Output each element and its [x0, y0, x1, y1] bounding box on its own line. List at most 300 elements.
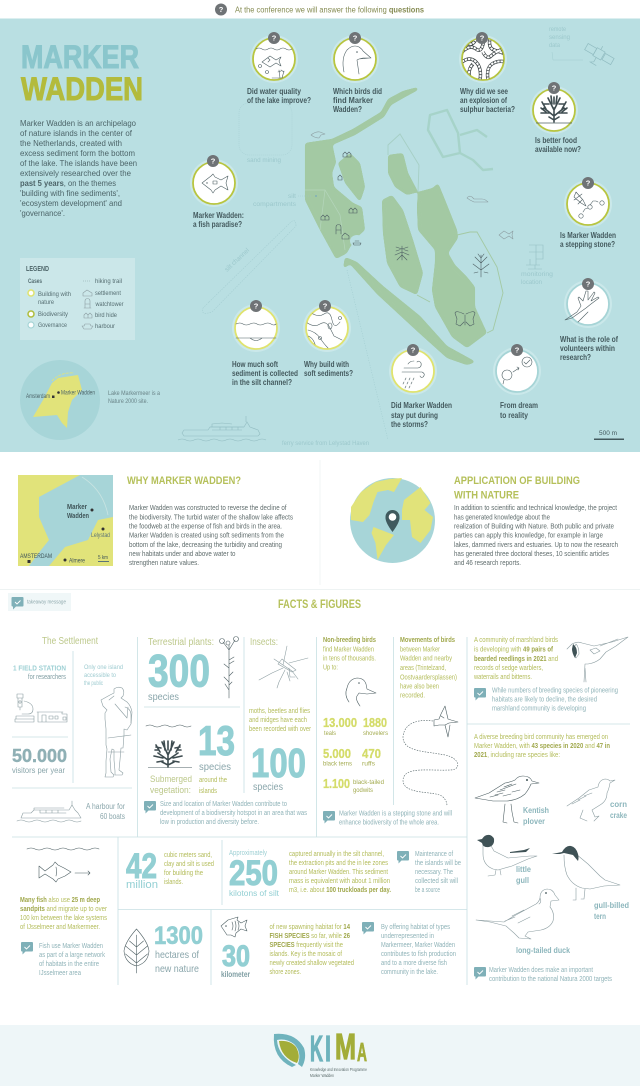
panel: submerged vegetation: species: [199, 762, 231, 773]
panel: 42 million: islands.: [164, 879, 183, 886]
question: food: [530, 82, 581, 154]
question: water quality: [247, 32, 311, 105]
question: volunteers: volunteers within: [560, 343, 615, 353]
text block: realization of Building with Nature. Both public and private: [454, 521, 614, 530]
takeaway: fish production: underrepresented in: [381, 933, 434, 940]
panel: submerged vegetation: [146, 717, 235, 796]
field station: [13, 664, 66, 681]
takeaway: marshland community: While numbers of breeding species of pioneering: [492, 688, 618, 694]
legend: LEGEND: [26, 266, 49, 273]
icon: mosquito: [395, 246, 409, 260]
takeaway: fish production: and to a more diverse fish: [381, 960, 447, 967]
intro text: the Netherlands, created with: [20, 138, 122, 148]
map labels: sensing: [549, 34, 570, 41]
locator map: Netherlands: [20, 360, 100, 440]
panel: 30 kilometer: newly created shallow vegetated: [270, 960, 354, 967]
takeaway: stepping stone: enhance biodiversity of the whole area.: [339, 820, 439, 826]
takeaway: habitat network: of habitats in the entire: [39, 961, 99, 968]
panel: insects: Insects:: [250, 637, 278, 648]
question: storms: the storms?: [391, 419, 428, 429]
takeaway: marshland community: habitats are likely to decline, the desired: [492, 696, 597, 704]
figures: shovelers: [363, 730, 389, 737]
figures: teals: [324, 730, 337, 737]
icon: fish: [499, 231, 513, 239]
logo: KIMA: M: [335, 1026, 356, 1067]
public access note: [84, 664, 123, 687]
text block: Marker Wadden was constructed to reverse the decline of: [129, 503, 287, 512]
takeaway: habitat network: IJsselmeer area: [39, 970, 81, 977]
panel: why Marker Wadden: [18, 475, 293, 567]
takeaway: biodiversity hotspot: [144, 801, 307, 826]
intro text: 'building with fine sediments',: [20, 188, 120, 198]
map labels: compartments: [253, 201, 297, 208]
panel: non-breeding birds: find Marker Wadden: [323, 646, 374, 654]
question: sulphur bacteria: an explosion of: [460, 95, 507, 105]
question: volunteers: research?: [560, 352, 591, 362]
map labels: ferry service from Lelystad Haven: [282, 440, 369, 447]
question: soft sediments: soft sediments?: [304, 368, 353, 378]
question: birds: find Marker: [333, 95, 374, 105]
legend: bird hide: [95, 313, 118, 319]
takeaway: habitat network: [21, 942, 105, 977]
panel: breeding birds: [474, 734, 629, 955]
figures: ruffs: [362, 761, 376, 768]
header text: At the conference we will answer the following questions: [235, 5, 425, 14]
panel: 42 million: 42: [126, 847, 157, 886]
question: storms: Did Marker Wadden: [391, 400, 452, 410]
text block: the biodiversity. The turbid water of the shallow lake affects: [129, 512, 293, 521]
panel: marshland birds: is developing with 49 pairs of: [474, 646, 554, 654]
question: soft sediments: [303, 300, 353, 378]
panel: submerged vegetation: around the: [199, 777, 227, 784]
takeaway: maintenance: [397, 851, 461, 894]
takeaway: stepping stone: Marker Wadden is a stepping stone and will: [339, 810, 452, 818]
panel: 250 kilotons: 250: [229, 854, 278, 893]
icon: watchtower and settlement: [336, 224, 349, 239]
harbour water: [350, 235, 364, 247]
panel: insects: and midges have each: [249, 717, 307, 724]
dotted flight route: [403, 720, 458, 806]
text block: parties can apply this knowledge, for example in large: [454, 531, 603, 540]
panel: non-breeding birds: Up to:: [323, 664, 338, 672]
text block: has generated three doctoral theses, 10 scientific articles: [454, 549, 609, 558]
island shapes: [305, 87, 487, 365]
panel: 42 million: [126, 847, 214, 891]
takeaway: maintenance: Maintenance of: [415, 851, 453, 858]
bird: Kentish plover: [475, 776, 549, 826]
legend: harbour: [95, 324, 115, 330]
icon: ferry: [17, 801, 81, 822]
takeaway: biodiversity hotspot: low in production and diversity before.: [160, 819, 259, 826]
bird: long-tailed duck: [476, 889, 570, 955]
map: Markermeer: [18, 475, 113, 566]
text block: and 46 research reports.: [454, 558, 521, 567]
figures: 1880: [363, 715, 387, 730]
panel: breeding birds: Marker Wadden, with 43 species in 2020 and 47 in: [474, 743, 610, 750]
question: storms: stay put during: [391, 410, 438, 420]
takeaway: Natura 2000: Marker Wadden does make an important: [489, 967, 593, 974]
globe with pin: [350, 478, 435, 563]
bird: long-tailed duck: long-tailed duck: [516, 945, 570, 955]
text block: [454, 503, 618, 567]
scale bar: 500 m: [599, 430, 617, 437]
intro text: 'governance'.: [20, 208, 65, 218]
text block: the foodweb at the expense of fish and birds in the area.: [129, 521, 282, 530]
figures: 470: [362, 746, 381, 761]
takeaway: fish production: By offering habitat of types: [381, 924, 450, 931]
question: food: available now?: [535, 144, 581, 154]
question: silt channel: [232, 300, 298, 387]
panel: movements of birds: Oostvaardersplassen): [400, 674, 457, 682]
bird: gull-billed tern: tern: [594, 911, 606, 921]
intro text: Marker Wadden is an archipelago: [20, 118, 136, 128]
question: dream to reality: From dream: [500, 400, 538, 410]
panel: non-breeding birds: [323, 637, 389, 794]
locator map: Netherlands: Amsterdam: [26, 394, 50, 400]
bird: corn crake: corn: [610, 799, 627, 809]
panel: submerged vegetation: Submerged: [150, 774, 192, 785]
header: conference questions: [215, 4, 425, 16]
panel: breeding birds: 2021, including rare species like:: [474, 752, 560, 759]
takeaway: biodiversity hotspot: development of a biodiversity hotspot in an area that was: [160, 810, 307, 817]
panel: movements of birds: recorded.: [400, 692, 425, 700]
intro text: excess sediment form the bottom: [20, 148, 135, 158]
map labels: location: [521, 279, 542, 286]
panel: insects: 100: [251, 740, 306, 786]
takeaway: Natura 2000: contribution to the national Natura 2000 targets: [489, 976, 612, 983]
icon: bearded reedling: [567, 637, 628, 682]
bird: corn crake: [567, 779, 627, 821]
figures: 13.000: [323, 715, 357, 730]
heading: [454, 475, 580, 502]
panel: application of building with nature: [350, 475, 618, 567]
panel: 250 kilotons: [229, 850, 391, 898]
panel: 250 kilotons: the extraction pits and the in lee zones: [289, 860, 388, 867]
panel: fish migration: 100 km between the lake systems: [20, 915, 107, 922]
question: dream to reality: to reality: [500, 410, 528, 420]
panel: fish migration: [20, 848, 108, 931]
panel: fish migration: of IJsselmeer and Markermeer.: [20, 924, 100, 931]
icon: bird hides: [321, 152, 357, 220]
map labels: silt: [288, 193, 296, 200]
visitors: [12, 746, 67, 775]
panel: 42 million: clay and silt is used: [164, 861, 214, 868]
text block: bottom of the lake, decreasing the turbidity and creating: [129, 540, 282, 549]
logo: KIMA: I: [325, 1028, 331, 1069]
panel: movements of birds: [400, 637, 458, 806]
question: silt channel: sediment is collected: [232, 368, 298, 378]
visitors: 50.000: [12, 746, 67, 766]
figures: [323, 715, 389, 794]
icon: monitoring tower: [526, 245, 543, 269]
panel: 42 million: cubic meters sand,: [164, 852, 212, 859]
panel: insects: been recorded with over: [249, 726, 312, 733]
harbour text: A harbour for: [86, 802, 125, 811]
panel: marshland birds: records of sedge warblers,: [474, 665, 543, 672]
panel: insects: [249, 637, 312, 793]
panel: 30 kilometer: FISH SPECIES so far, while 26: [270, 933, 350, 940]
intro text: [20, 118, 137, 218]
question: water quality: Did water quality: [247, 86, 301, 96]
heading: The Settlement: [42, 636, 98, 647]
logo: KIMA: Marker Wadden: [310, 1073, 334, 1078]
intro text: extensively researched over the: [20, 168, 131, 178]
panel: marshland birds: A community of marshland birds: [474, 637, 558, 644]
question: fish paradise: a fish paradise?: [193, 219, 242, 229]
figures: godwits: [353, 787, 374, 794]
panel: 250 kilotons: m3, i.e. about 100 truckloads per day.: [289, 887, 391, 894]
panel: map section: [0, 18, 640, 452]
icon: bird: [311, 132, 325, 138]
panel: submerged vegetation: vegetation:: [150, 785, 191, 796]
takeaway: fish production: community in the lake.: [381, 969, 438, 976]
question: fish paradise: Marker Wadden:: [193, 210, 244, 220]
icon: question badge: [215, 4, 227, 16]
heading: facts and figures: FACTS & FIGURES: [278, 597, 361, 611]
question: silt channel: in the silt channel?: [232, 377, 292, 387]
legend: nature: [38, 300, 55, 306]
legend: Biodiversity: [38, 312, 68, 318]
takeaway: fish production: contributes to fish production: [381, 951, 456, 958]
panel: 30 kilometer: islands. Key is the mosaic of: [270, 951, 342, 958]
map labels: silt channel: [224, 247, 251, 273]
ferry dashed route: [347, 270, 388, 440]
question: birds: [331, 32, 382, 114]
panel: fish migration: Many fish also use 25 m deep: [20, 897, 100, 904]
panel: submerged vegetation: islands: [199, 788, 217, 795]
icon: flying bird: [434, 706, 458, 737]
water structures: [428, 110, 493, 170]
figures: black terns: [323, 761, 353, 768]
map: islands: [178, 26, 624, 447]
map: Markermeer: Lelystad: [91, 532, 110, 539]
panel: 42 million: million: [126, 879, 158, 891]
bird: Kentish plover: plover: [523, 816, 546, 826]
question: sulphur bacteria: Why did we see: [460, 86, 508, 96]
bird: corn crake: crake: [610, 810, 627, 820]
harbour text: 60 boats: [100, 812, 125, 821]
panel: insects: moths, beetles and flies: [249, 708, 310, 715]
panel: 250 kilotons: Approximately: [229, 850, 267, 857]
legend: Building with: [38, 292, 71, 298]
icon: fish with arrow: [39, 862, 90, 882]
locator caption: Lake Markermeer is a: [108, 390, 160, 397]
question: fish paradise: [190, 155, 244, 229]
question: silt channel: How much soft: [232, 359, 278, 369]
panel: 30 kilometer: SPECIES frequently visit the: [270, 942, 343, 949]
map labels: monitoring: [521, 271, 553, 278]
intro text: 'ecosystem development' and: [20, 198, 122, 208]
takeaway: biodiversity hotspot: Size and location of Marker Wadden contribute to: [160, 801, 287, 808]
panel: 250 kilotons: around Marker Wadden. This sediment: [289, 869, 388, 876]
icon: duck head: [346, 678, 376, 706]
question: volunteers: [560, 278, 618, 362]
map: Markermeer: Wadden: [67, 511, 89, 520]
panel: new nature: 1300: [154, 922, 203, 950]
scale bar: [594, 430, 624, 440]
heading: WHY MARKER WADDEN?: [127, 475, 241, 487]
legend: takeaway message: takeaway message: [27, 600, 66, 606]
icon: fish: [221, 917, 247, 937]
question: soft sediments: Why build with: [304, 359, 349, 369]
panel: terrestrial plants: species: [148, 691, 179, 703]
text block: has generated knowledge about the: [454, 512, 550, 521]
text block: strengthen nature values.: [129, 558, 199, 567]
question: birds: Wadden?: [333, 104, 362, 114]
panel: new nature: new nature: [155, 963, 199, 975]
panel: terrestrial plants: Terrestrial plants:: [148, 637, 214, 648]
panel: fish migration: sandpits and migrate up to over: [20, 906, 108, 913]
takeaway: fish production: [362, 922, 456, 976]
takeaway: marshland community: marshland community is developing: [492, 706, 586, 712]
takeaway: marshland community: [474, 688, 618, 712]
text block: Marker Wadden is created using soft sediments from the: [129, 531, 284, 540]
bird: little gull: [477, 835, 537, 885]
public access note: accessible to: [84, 672, 116, 679]
map labels: remote: [549, 26, 566, 33]
question: stepping stone: a stepping stone?: [560, 239, 615, 249]
panel: 30 kilometer: kilometer: [221, 970, 250, 979]
visitors: visitors per year: [12, 765, 65, 775]
panel: movements of birds: have also been: [400, 684, 439, 690]
panel: 30 kilometer: 30: [222, 940, 250, 973]
field station: 1 FIELD STATION: [13, 664, 66, 672]
heading: APPLICATION OF BUILDING: [454, 475, 580, 487]
panel: insects: species: [253, 782, 283, 793]
panel: 250 kilotons: mass is equivalent with about 1 million: [289, 878, 390, 885]
intro text: past 5 years, on the themes: [20, 178, 116, 188]
takeaway: habitat network: as part of a large network: [39, 952, 105, 959]
panel: terrestrial plants: [148, 636, 238, 703]
figures: 5.000: [323, 746, 351, 761]
takeaway: maintenance: be a source: [415, 887, 440, 894]
icon: satellite: [581, 39, 617, 72]
locator map: Netherlands: Marker Wadden: [61, 390, 95, 396]
footer: [0, 1025, 640, 1086]
panel: 250 kilotons: kilotons of silt: [229, 888, 280, 898]
legend: [20, 258, 135, 340]
question: birds: Which birds did: [333, 86, 382, 96]
takeaway: fish production: Markermeer, Marker Wadden: [381, 942, 455, 949]
icon: mosquito: [259, 646, 308, 688]
question: water quality: of the lake improve?: [247, 95, 311, 105]
panel: non-breeding birds: in tens of thousands.: [323, 656, 376, 662]
public access note: the public: [84, 680, 104, 687]
question: stepping stone: [560, 177, 616, 249]
panel: new nature: hectares of: [155, 949, 199, 961]
logo: KIMA: Knowledge and Innovation Programme: [310, 1067, 367, 1072]
question: sulphur bacteria: sulphur bacteria?: [460, 104, 515, 114]
map: Markermeer: Almere: [69, 558, 85, 564]
bird: gull-billed tern: [552, 846, 629, 921]
question: food: Is better food: [535, 135, 577, 145]
legend: hiking trail: [95, 279, 122, 285]
legend: settlement: [95, 291, 121, 297]
takeaway: Natura 2000: [474, 967, 612, 983]
text block: new habitats under and above water to: [129, 549, 236, 558]
icon: microscope and building: [15, 694, 67, 722]
panel: new nature: [124, 922, 203, 975]
icon: coral: [154, 741, 182, 767]
logo: KIMA: [274, 1026, 367, 1078]
title: [21, 39, 143, 107]
map: Markermeer: AMSTERDAM: [20, 553, 52, 560]
takeaway: maintenance: collected silt will: [415, 878, 458, 885]
locator caption: [108, 390, 160, 405]
takeaway: maintenance: the islands will be: [415, 860, 461, 867]
figures: black-tailed: [353, 779, 384, 786]
question: stepping stone: Is Marker Wadden: [560, 230, 616, 240]
text block: [129, 503, 293, 567]
icon: ferry: [178, 416, 266, 441]
bird: gull-billed tern: gull-billed: [594, 900, 629, 910]
harbour text: [86, 802, 125, 821]
icon: butterfly: [455, 312, 475, 326]
figures: 1.100: [323, 776, 350, 791]
map: Markermeer: Marker: [67, 502, 87, 511]
panel: movements of birds: Wadden and nearby: [400, 656, 452, 662]
question: storms: [389, 344, 452, 429]
locator caption: Nature 2000 site.: [108, 398, 148, 405]
icon: duck: [467, 196, 488, 202]
panel: marshland birds: bearded reedlings in 2021 and: [474, 656, 558, 663]
map labels: data: [549, 42, 560, 49]
intro text: of nature islands in the center of: [20, 128, 133, 138]
field station: for researchers: [28, 674, 66, 681]
icon: plant: [473, 254, 489, 277]
panel: the settlement: [12, 636, 132, 822]
panel: terrestrial plants: 300: [148, 646, 210, 696]
takeaway: maintenance: necessary. The: [415, 869, 453, 876]
bird: little gull: gull: [516, 875, 529, 885]
title: MARKER: [21, 39, 139, 75]
panel: breeding birds: A diverse breeding bird community has emerged on: [474, 734, 608, 741]
question: volunteers: What is the role of: [560, 334, 618, 344]
panel: non-breeding birds: Non-breeding birds: [323, 637, 376, 644]
panel: submerged vegetation: 13: [198, 717, 235, 764]
panel: movements of birds: Movements of birds: [400, 637, 455, 644]
panel: 30 kilometer: of new spawning habitat for 14: [270, 924, 350, 931]
map: Markermeer: 5 km: [98, 555, 108, 561]
takeaway: stepping stone: [323, 810, 452, 826]
takeaway: habitat network: Fish use Marker Wadden: [39, 943, 103, 950]
panel: marshland birds: waterrails and bitterns.: [473, 674, 532, 681]
legend: Governance: [38, 323, 68, 329]
panel: movements of birds: areas (Trintelzand,: [400, 665, 446, 672]
logo: KIMA: A: [357, 1037, 367, 1067]
panel: 250 kilotons: captured annually in the silt channel,: [289, 851, 384, 858]
map labels: [202, 26, 583, 447]
legend: watchtower: [95, 302, 124, 308]
legend: takeaway message: [8, 593, 71, 611]
icon: person with binoculars: [101, 687, 132, 777]
question: dream to reality: [493, 344, 541, 420]
bird: Kentish plover: Kentish: [523, 805, 549, 815]
panel: 42 million: for building the: [164, 870, 203, 877]
bird: little gull: little: [516, 864, 531, 874]
panel: 30 kilometer: [221, 917, 354, 979]
panel: 30 kilometer: shore zones.: [270, 969, 301, 976]
logo: KIMA: K: [310, 1028, 323, 1069]
legend: Cases: [28, 279, 43, 285]
panel: marshland birds: [473, 637, 628, 682]
public access note: Only one island: [84, 664, 123, 671]
icon: plant: [220, 636, 238, 698]
map labels: sand mining: [247, 157, 281, 164]
panel: movements of birds: between Marker: [400, 646, 441, 654]
icon: leaf: [124, 929, 149, 973]
title: WADDEN: [21, 71, 143, 107]
